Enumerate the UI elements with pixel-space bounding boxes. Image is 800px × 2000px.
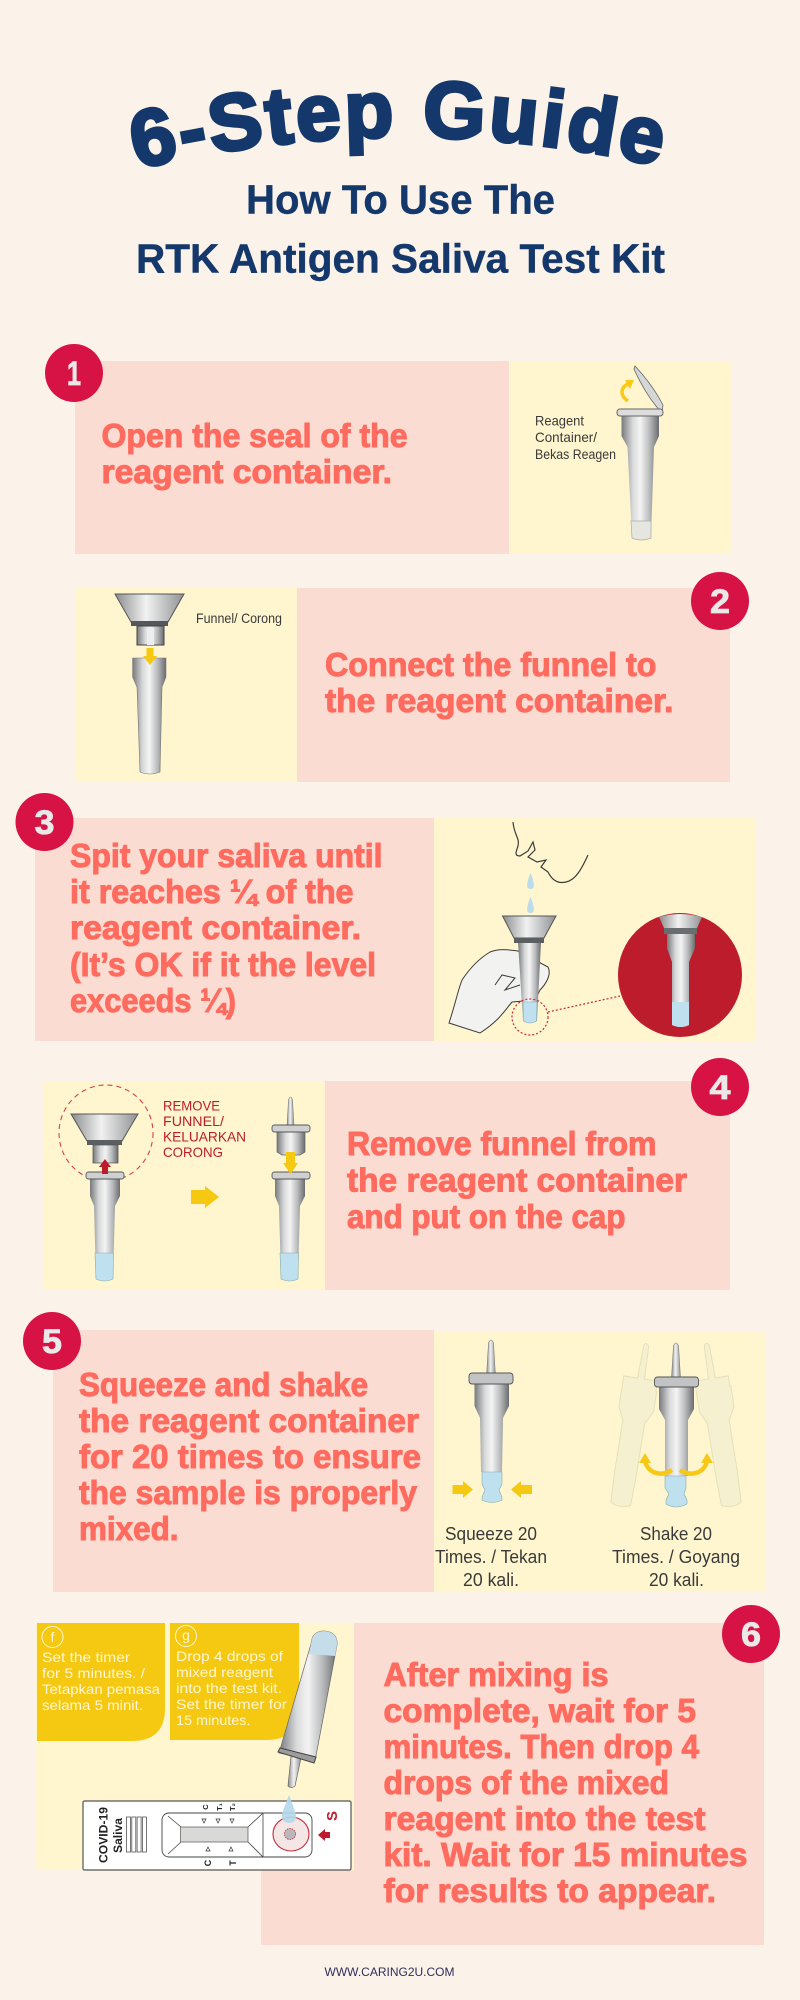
step 6 text: for results to appear. xyxy=(384,1872,716,1909)
step 4 text xyxy=(347,1125,687,1235)
icon: reagent container xyxy=(133,658,166,774)
shake caption xyxy=(612,1524,740,1590)
icon: hand holding tube xyxy=(449,950,549,1033)
step 5 text: Squeeze and shake xyxy=(79,1366,368,1403)
step 6 text: drops of the mixed xyxy=(384,1764,669,1801)
S marker and arrow: S xyxy=(324,1811,341,1821)
badge 6 xyxy=(722,1605,780,1663)
shake caption: 20 kali. xyxy=(649,1570,704,1590)
step 2 text: the reagent container. xyxy=(325,682,674,719)
sample well xyxy=(273,1817,309,1851)
icon: open reagent container xyxy=(617,366,663,540)
panel: step 6 xyxy=(36,1623,764,1945)
step 6 text: reagent into the test xyxy=(384,1800,706,1837)
card markers: T xyxy=(228,1860,238,1866)
instruction box f: Set the timer xyxy=(42,1649,130,1665)
icon: dropper xyxy=(278,1631,337,1788)
step 3 text: exceeds ¼) xyxy=(70,982,236,1019)
remove funnel label: CORONG xyxy=(163,1144,223,1160)
S marker and arrow xyxy=(318,1811,341,1841)
icon: down arrow xyxy=(283,1152,298,1174)
card markers: T₁ xyxy=(215,1803,224,1811)
card markers xyxy=(201,1803,238,1866)
badge 1: 1 xyxy=(67,355,81,393)
step 2 text xyxy=(325,646,674,719)
panel: step 2 xyxy=(76,588,730,782)
card markers: C xyxy=(201,1804,210,1810)
instruction box g: 15 minutes. xyxy=(176,1712,250,1728)
icon: cap xyxy=(272,1097,310,1155)
card label xyxy=(98,1807,125,1863)
icon: down arrow xyxy=(143,648,157,665)
subtitle: RTK Antigen Saliva Test Kit xyxy=(136,236,665,282)
icon: funnel xyxy=(115,594,184,645)
step 6 text: kit. Wait for 15 minutes xyxy=(384,1836,748,1873)
remove funnel label xyxy=(163,1098,246,1160)
step 3 text: reagent container. xyxy=(70,909,361,946)
icon: yellow curved arrow xyxy=(622,380,634,401)
subtitle: How To Use The xyxy=(246,176,555,222)
step 4 text: Remove funnel from xyxy=(347,1125,656,1162)
step 6 text: minutes. Then drop 4 xyxy=(384,1728,700,1765)
step 6 text: complete, wait for 5 xyxy=(384,1692,696,1729)
card label: COVID-19 xyxy=(98,1807,110,1863)
squeeze caption xyxy=(435,1524,547,1590)
step 1 text: Open the seal of the xyxy=(102,417,408,454)
instruction box f xyxy=(37,1623,165,1741)
footer: WWW.CARING2U.COM xyxy=(324,1965,454,1979)
reagent container label: Bekas Reagen xyxy=(535,446,616,462)
instruction box f: Tetapkan pemasa xyxy=(42,1681,160,1697)
panel: step 3 xyxy=(35,818,756,1041)
icon: squeeze arrows xyxy=(452,1481,532,1498)
icon: funnel and tube xyxy=(502,916,556,1023)
step 5 text: the sample is properly xyxy=(79,1474,418,1511)
card barcode stripes xyxy=(126,1817,146,1852)
reagent container label: Reagent xyxy=(535,412,584,428)
step 5 text xyxy=(79,1366,421,1547)
icon: saliva drops xyxy=(527,873,534,913)
remove funnel label: REMOVE xyxy=(163,1098,220,1114)
step 3 text: (It’s OK if it the level xyxy=(70,946,376,983)
step 1 text: reagent container. xyxy=(102,453,392,490)
icon: right arrow xyxy=(191,1186,219,1208)
instruction box g xyxy=(170,1623,299,1740)
step 3 text: Spit your saliva until xyxy=(70,837,382,874)
shake caption: Times. / Goyang xyxy=(612,1547,740,1567)
icon: funnel removed xyxy=(71,1114,138,1163)
step 3 text xyxy=(70,837,382,1019)
panel: step 1 xyxy=(75,361,731,554)
instruction box g: Set the timer for xyxy=(176,1696,287,1712)
badge 2: 2 xyxy=(710,583,730,621)
step 4 text: and put on the cap xyxy=(347,1198,626,1235)
icon: shake arrows xyxy=(639,1453,713,1474)
funnel label: Funnel/ Corong xyxy=(196,610,282,626)
title xyxy=(130,80,663,167)
step 5 text: for 20 times to ensure xyxy=(79,1438,421,1475)
card markers: T₂ xyxy=(228,1803,237,1811)
title: 6-Step Guide xyxy=(130,80,663,167)
instruction box f: for 5 minutes. / xyxy=(42,1665,145,1681)
icon: tube left xyxy=(86,1172,124,1281)
instruction box g: Drop 4 drops of xyxy=(176,1648,283,1664)
card markers: C xyxy=(203,1859,213,1866)
callout: dashed circle and line xyxy=(512,996,620,1035)
panel: step 5 xyxy=(53,1330,765,1592)
squeeze caption: 20 kali. xyxy=(463,1570,519,1590)
remove funnel label: KELUARKAN xyxy=(163,1128,246,1144)
instruction box f: f xyxy=(51,1629,55,1645)
card result window xyxy=(162,1813,312,1857)
icon: red up arrow xyxy=(99,1159,111,1174)
subtitle xyxy=(136,176,665,282)
badge 4: 4 xyxy=(710,1069,731,1107)
icon: tube right xyxy=(272,1172,310,1281)
instruction box g: into the test kit. xyxy=(176,1680,282,1696)
instruction box g: g xyxy=(182,1627,190,1643)
badge 5: 5 xyxy=(42,1323,62,1361)
step 3 text: it reaches ¼ of the xyxy=(70,873,354,910)
badge 3: 3 xyxy=(34,804,54,842)
badge 2 xyxy=(691,572,749,630)
squeeze caption: Squeeze 20 xyxy=(445,1524,537,1544)
icon: squeeze tube xyxy=(469,1340,513,1502)
shake caption: Shake 20 xyxy=(640,1524,712,1544)
badge 4 xyxy=(691,1058,749,1116)
dashed circle around funnel xyxy=(59,1085,153,1181)
badge 5 xyxy=(23,1312,81,1370)
step 5 text: the reagent container xyxy=(79,1402,419,1439)
icon: face profile xyxy=(513,822,588,883)
card label: Saliva xyxy=(113,1817,125,1853)
test kit card xyxy=(83,1801,351,1870)
instruction box g: mixed reagent xyxy=(176,1664,273,1680)
step 1 text xyxy=(102,417,408,490)
reagent container label xyxy=(535,412,616,462)
squeeze caption: Times. / Tekan xyxy=(435,1547,547,1567)
reagent container label: Container/ xyxy=(535,429,597,445)
remove funnel label: FUNNEL/ xyxy=(163,1113,224,1129)
badge 3 xyxy=(16,793,74,851)
instruction box f: selama 5 minit. xyxy=(42,1697,143,1713)
badge 6: 6 xyxy=(741,1616,761,1654)
panel: step 4 xyxy=(44,1081,730,1290)
badge 1 xyxy=(45,344,103,402)
step 5 text: mixed. xyxy=(79,1510,178,1547)
icon: drop xyxy=(282,1795,296,1823)
step 6 text xyxy=(384,1656,748,1909)
step 2 text: Connect the funnel to xyxy=(325,646,656,683)
step 6 text: After mixing is xyxy=(384,1656,608,1693)
icon: ghost tubes xyxy=(604,1341,749,1509)
step 4 text: the reagent container xyxy=(347,1162,687,1198)
icon: magnified red circle xyxy=(618,913,742,1037)
icon: shake tube xyxy=(654,1343,698,1507)
